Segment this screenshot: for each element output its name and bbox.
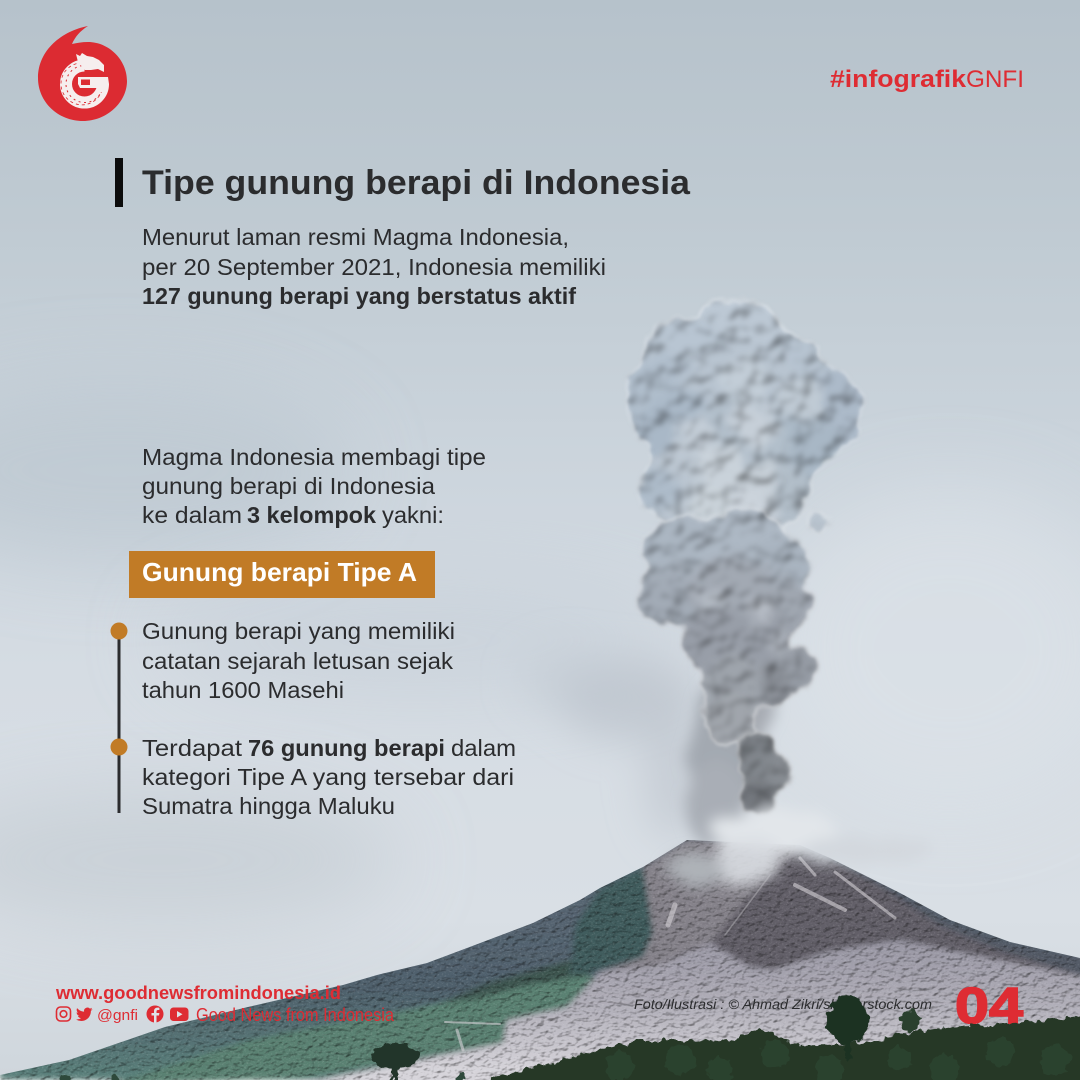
bullet text 1: tahun 1600 Masehi — [142, 677, 344, 703]
classification text block: Magma Indonesia membagi tipe — [142, 444, 486, 470]
photo credit: Foto/Ilustrasi : © Ahmad Zikri/shutterstock.com — [634, 997, 932, 1012]
foreground trees — [59, 996, 1080, 1080]
website: www.goodnewsfromindonesia.id — [55, 983, 341, 1003]
eruption smoke column — [627, 299, 864, 850]
dark cone — [710, 845, 1080, 978]
crater wall — [600, 840, 800, 972]
page name: Good News from Indonesia — [196, 1005, 395, 1025]
bullet text 2: Sumatra hingga Maluku — [142, 793, 395, 819]
intro text block: Menurut laman resmi Magma Indonesia, — [142, 224, 569, 250]
dark forest strip — [447, 960, 590, 1003]
icon: youtube — [170, 1008, 188, 1021]
logo garuda G emblem — [61, 53, 109, 105]
logo — [38, 26, 127, 121]
forested slope — [0, 830, 1080, 1080]
middle column — [642, 510, 815, 744]
small tree right of tall tree — [900, 1009, 920, 1031]
bullet text 2: kategori Tipe A yang tersebar dari — [142, 764, 514, 790]
lower column haze — [686, 680, 777, 850]
white cloud over the crater — [665, 810, 935, 884]
bullet text 2 — [142, 735, 516, 819]
bullet text 2: Terdapat — [142, 735, 243, 761]
icon: twitter — [76, 1008, 93, 1021]
type A label — [129, 551, 435, 598]
blue-grey right ridge — [892, 890, 1080, 973]
type A label: Gunung berapi Tipe A — [142, 557, 417, 587]
mountain — [0, 830, 1080, 1080]
bullet text 2: dalam — [451, 735, 516, 761]
title: Tipe gunung berapi di Indonesia — [142, 164, 691, 202]
hashtag: #infografik — [830, 66, 967, 93]
logo red swirl — [38, 26, 127, 121]
mushroom cloud top — [627, 299, 864, 559]
classification text block: ke dalam — [142, 502, 242, 528]
rock texture — [0, 830, 1080, 1080]
pale drifting cloud left of the column — [520, 650, 705, 840]
hashtag — [830, 66, 1024, 93]
mountain colour regions — [0, 830, 1080, 1080]
intro text block: 127 gunung berapi yang berstatus aktif — [142, 283, 576, 309]
isolated tree — [371, 1043, 419, 1080]
intro text block: per 20 September 2021, Indonesia memiliki — [142, 254, 606, 280]
tree line — [488, 1014, 1080, 1080]
tall tree — [827, 996, 869, 1060]
ash flow — [270, 940, 1080, 1080]
icon: instagram — [56, 1007, 70, 1021]
hashtag: GNFI — [966, 66, 1024, 93]
title accent bar — [115, 158, 123, 207]
light streaks on cone — [445, 858, 895, 1050]
icon: facebook — [146, 1006, 164, 1022]
rock speckle — [0, 830, 1080, 1080]
bullet text 2: 76 gunung berapi — [248, 735, 445, 761]
bullet timeline — [110, 622, 128, 813]
bullet text 1 — [142, 618, 455, 703]
classification text block: gunung berapi di Indonesia — [142, 473, 435, 499]
bullet text 1: Gunung berapi yang memiliki — [142, 618, 455, 644]
footer website and social links — [55, 983, 395, 1025]
classification text block: yakni: — [382, 502, 444, 528]
lit tree crowns — [606, 1038, 1070, 1080]
handle: @gnfi — [97, 1007, 138, 1024]
bullet text 1: catatan sejarah letusan sejak — [142, 648, 454, 674]
distant shrubs — [59, 1074, 466, 1080]
classification text block: 3 kelompok — [247, 502, 376, 528]
dark ash lump — [740, 728, 790, 814]
green flank — [571, 868, 652, 974]
classification text block — [142, 444, 486, 528]
page number: 04 — [955, 977, 1024, 1034]
intro text block — [142, 224, 606, 309]
meadow patch — [110, 975, 600, 1080]
